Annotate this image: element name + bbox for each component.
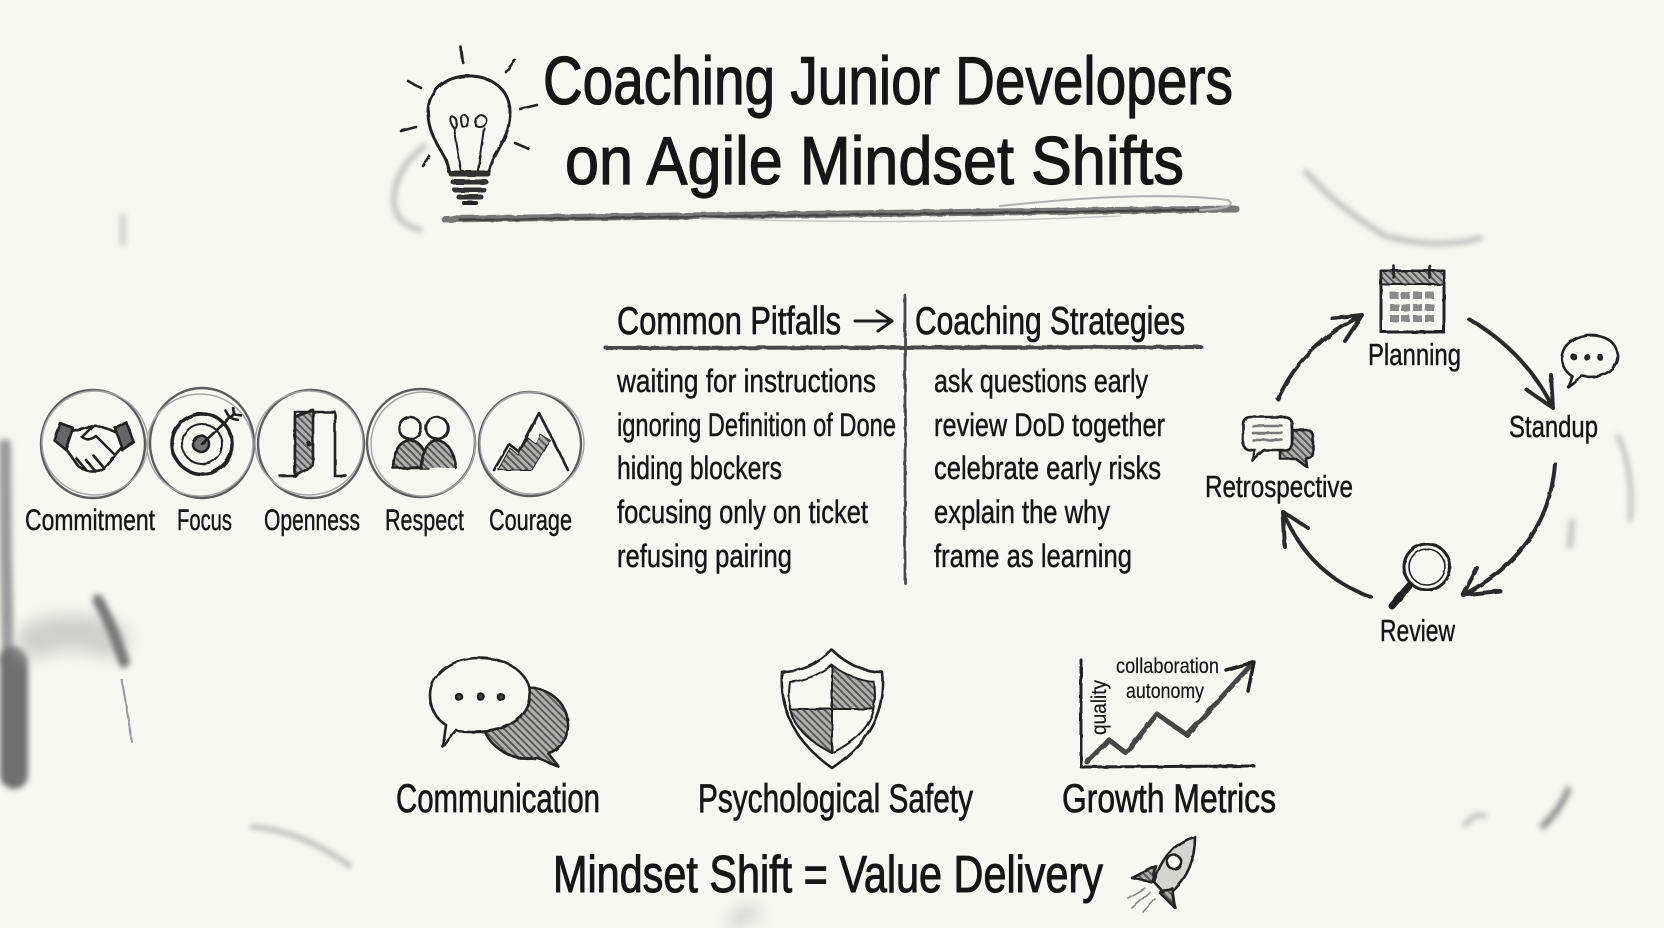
label: standup: Standup	[1509, 409, 1598, 444]
label: planning: Planning	[1368, 337, 1461, 372]
value labels: Focus	[177, 504, 232, 537]
icon: two people	[393, 417, 456, 468]
icon: rocket	[1128, 837, 1195, 912]
icon: standup speech bubble	[1562, 335, 1618, 387]
label: retrospective: Retrospective	[1205, 469, 1353, 504]
pitfalls list: waiting for instructions	[616, 363, 876, 399]
panel: sprint cycle	[1205, 266, 1618, 648]
icon: calendar	[1381, 266, 1444, 332]
arrow: retrospective to planning	[1278, 315, 1362, 399]
chart labels: quality	[1088, 680, 1111, 735]
chart labels	[1088, 655, 1219, 735]
arrow: review to retrospective	[1283, 512, 1371, 597]
value: courage	[479, 392, 584, 496]
icon: shield	[782, 650, 883, 768]
pitfalls list: focusing only on ticket	[617, 494, 868, 530]
chart: rising line	[1081, 660, 1254, 767]
panel: agile values	[25, 388, 584, 537]
value labels	[25, 504, 572, 537]
value labels: Openness	[264, 504, 360, 537]
conclusion: Mindset Shift = Value Delivery	[553, 846, 1103, 904]
smudge beside bulb	[394, 145, 426, 230]
label: growth metrics: Growth Metrics	[1062, 777, 1276, 821]
value labels: Courage	[489, 504, 572, 537]
icon: target	[172, 408, 241, 474]
pitfalls list: refusing pairing	[617, 538, 792, 574]
icon: mountains	[494, 413, 568, 470]
panel: growth metrics	[1062, 655, 1276, 821]
chart labels: autonomy	[1126, 680, 1204, 703]
arrow: planning to standup	[1469, 319, 1553, 408]
strategies list: frame as learning	[934, 538, 1132, 574]
icon: handshake	[54, 422, 134, 472]
value: commitment	[41, 390, 148, 498]
label: psychological safety: Psychological Safety	[698, 777, 973, 821]
pitfalls list: hiding blockers	[617, 450, 782, 486]
panel: psychological safety	[698, 650, 973, 821]
arrow: standup to review	[1463, 464, 1555, 595]
icon: retrospective bubbles	[1243, 417, 1313, 467]
panel: pitfalls and strategies table	[606, 295, 1201, 583]
title: Coaching Junior Developers	[543, 43, 1233, 119]
icon: magnifying glass	[1392, 544, 1450, 606]
strategies list: celebrate early risks	[934, 450, 1161, 486]
label: communication: Communication	[396, 777, 600, 821]
table rules	[606, 295, 1201, 583]
heading: coaching strategies: Coaching Strategies	[915, 300, 1185, 343]
chart labels: collaboration	[1116, 655, 1219, 678]
title	[543, 43, 1233, 199]
panel: communication	[396, 658, 600, 821]
strategies list	[934, 363, 1165, 574]
value: focus	[147, 388, 254, 498]
value labels: Respect	[385, 504, 464, 537]
arrow: pitfalls to strategies	[855, 311, 892, 331]
label: review: Review	[1380, 613, 1455, 648]
title underline	[445, 196, 1236, 222]
value: openness	[255, 390, 364, 498]
heading: common pitfalls: Common Pitfalls	[617, 300, 841, 343]
strategies list: review DoD together	[934, 407, 1165, 443]
value labels: Commitment	[25, 504, 156, 537]
icon: speech bubbles	[430, 658, 568, 767]
icon: open door	[280, 410, 346, 476]
title: on Agile Mindset Shifts	[565, 123, 1184, 199]
pitfalls list: ignoring Definition of Done	[617, 407, 896, 443]
pitfalls list	[616, 363, 896, 574]
strategies list: explain the why	[934, 494, 1110, 530]
icon: light bulb	[401, 47, 537, 203]
strategies list: ask questions early	[934, 363, 1148, 399]
background smudges	[5, 172, 1631, 925]
value: respect	[367, 389, 475, 497]
